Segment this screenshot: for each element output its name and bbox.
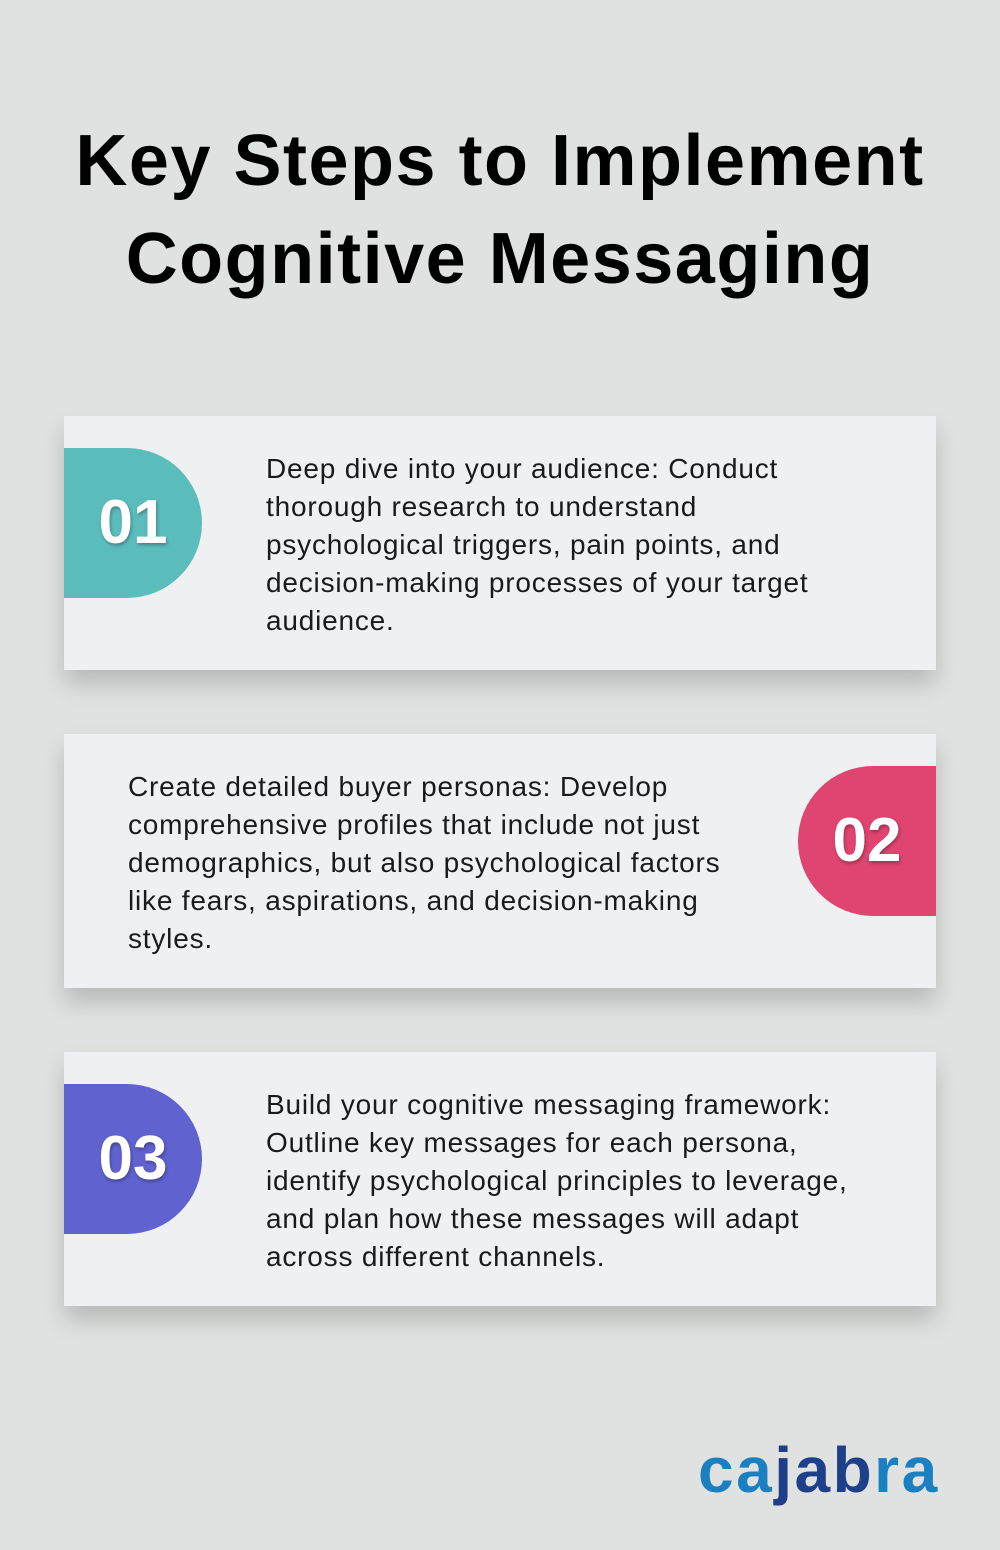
text 1: audience. (266, 605, 395, 636)
title (75, 121, 925, 299)
text 3: and plan how these messages will adapt (266, 1203, 799, 1234)
text 1: Deep dive into your audience: Conduct (266, 453, 778, 484)
card 1 (64, 416, 936, 670)
badge 01: 01 (99, 488, 167, 557)
text 1: thorough research to understand (266, 491, 697, 522)
badge 01 (64, 448, 202, 598)
badge 03: 03 (99, 1124, 167, 1193)
text 1: psychological triggers, pain points, and (266, 529, 781, 560)
text 3 (266, 1089, 848, 1272)
text 1: decision-making processes of your target (266, 567, 808, 598)
text 2: like fears, aspirations, and decision-making (128, 885, 699, 916)
text 2: demographics, but also psychological factors (128, 847, 720, 878)
text 2: styles. (128, 923, 213, 954)
card 3 (64, 1052, 936, 1306)
logo: cajabra (698, 1434, 940, 1506)
text 3: Outline key messages for each persona, (266, 1127, 798, 1158)
title: Cognitive Messaging (126, 219, 874, 299)
text 2: Create detailed buyer personas: Develop (128, 771, 668, 802)
text 3: across different channels. (266, 1241, 605, 1272)
title: Key Steps to Implement (75, 121, 925, 201)
text 1 (266, 453, 808, 636)
badge 02 (798, 766, 936, 916)
card 2 (64, 734, 936, 988)
text 2: comprehensive profiles that include not just (128, 809, 700, 840)
text 3: Build your cognitive messaging framework: (266, 1089, 831, 1120)
badge 03 (64, 1084, 202, 1234)
text 3: identify psychological principles to leverage, (266, 1165, 848, 1196)
badge 02: 02 (833, 806, 901, 875)
text 2 (128, 771, 720, 954)
